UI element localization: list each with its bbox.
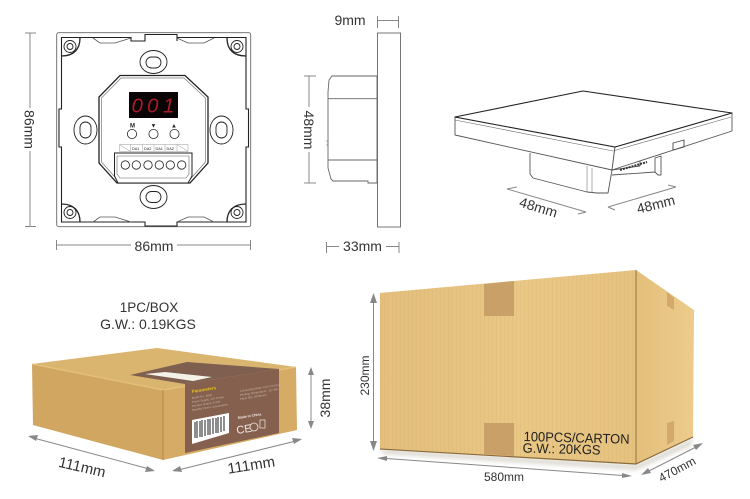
white label	[145, 372, 212, 381]
LED display	[129, 92, 178, 118]
small box caption	[100, 300, 196, 332]
dimension: 86mm height: 86mm	[22, 110, 38, 149]
barcode	[192, 413, 229, 444]
dimension: 111mm left: 111mm	[57, 454, 107, 481]
box right face	[163, 367, 297, 460]
dimension: 580mm	[377, 456, 632, 484]
small retail box: Connecting Mode: CV1-CV4 base	[240, 382, 282, 393]
small retail box: Standby Power: consumption	[192, 402, 229, 412]
carton shadow	[380, 438, 694, 470]
brown label	[130, 362, 279, 384]
perspective view drawing	[455, 91, 732, 193]
dimension: 48mm side: 48mm	[301, 111, 317, 149]
carton label: G.W.: 20KGS	[522, 441, 601, 458]
tape strips	[484, 281, 514, 316]
carton front face	[380, 270, 636, 464]
dimension: 230mm	[358, 293, 377, 451]
small retail box: Model No.: B0/D	[192, 393, 212, 400]
dimension: 9mm	[334, 12, 398, 28]
dimension: 38mm	[308, 367, 333, 429]
buttons: ▲	[171, 124, 177, 130]
terminal block: DA2	[166, 147, 174, 151]
dimension: 86mm width: 86mm	[135, 238, 173, 254]
carton label: 100PCS/CARTON	[523, 429, 630, 447]
dimension: 48mm right: 48mm	[635, 192, 677, 217]
dimension: 33mm	[326, 238, 399, 254]
buttons	[127, 124, 179, 139]
small retail box	[32, 348, 297, 460]
dimension: 48mm left: 48mm	[518, 194, 559, 221]
corner mounts	[62, 38, 246, 222]
small retail box: Dim Bus Output: 0-10V	[192, 400, 221, 408]
small retail box: Power Supply: 12V Power	[192, 395, 224, 404]
box top face	[32, 348, 296, 390]
small box caption: 1PC/BOX	[120, 300, 178, 315]
small box caption: G.W.: 0.19KGS	[100, 316, 196, 332]
terminal block: DA1	[156, 147, 163, 151]
dimension: 111mm left	[28, 435, 155, 481]
dimension: 470mm	[641, 443, 703, 485]
dimension: 230mm: 230mm	[358, 355, 372, 396]
central module	[99, 76, 208, 183]
dimension: 580mm: 580mm	[484, 470, 524, 484]
certification marks: CE	[236, 423, 253, 437]
dimension: 86mm height	[22, 33, 38, 226]
dimension: 48mm left	[507, 187, 586, 221]
LED display: 0	[132, 94, 144, 118]
dimension: 111mm right	[172, 438, 302, 478]
large carton	[380, 270, 694, 464]
small retail box: Panel Size: 86*86mm	[240, 393, 267, 401]
LED display: 1	[163, 94, 174, 118]
panel outline	[57, 33, 251, 227]
certification marks	[236, 412, 265, 437]
box left face	[32, 364, 163, 460]
front view drawing of panel	[57, 33, 251, 227]
side view drawing	[326, 33, 400, 227]
mounting slots	[74, 50, 233, 208]
buttons: M	[130, 124, 135, 130]
inner frame	[59, 34, 248, 226]
small retail box: Working Temperature: -10~40C	[240, 387, 279, 397]
LED display: 0	[147, 94, 159, 118]
carton side face	[636, 270, 694, 464]
dimension: 470mm: 470mm	[656, 454, 698, 485]
label text: Parameters	[191, 385, 217, 394]
edge clips	[93, 38, 214, 222]
dimension: 48mm side	[301, 76, 317, 183]
dimension: 111mm right: 111mm	[226, 453, 276, 478]
dimension: 48mm right	[608, 185, 677, 217]
dimension: 86mm width	[56, 238, 250, 254]
dimension: 33mm: 33mm	[343, 238, 382, 254]
carton label	[522, 429, 630, 458]
dimension: 38mm: 38mm	[317, 379, 333, 417]
terminal block: DA1	[132, 147, 139, 151]
dimension: 9mm: 9mm	[334, 12, 366, 28]
certification marks: Made in China	[238, 412, 262, 420]
terminal block: DA2	[144, 147, 151, 151]
buttons: ▼	[150, 124, 156, 130]
terminal block	[114, 144, 192, 183]
